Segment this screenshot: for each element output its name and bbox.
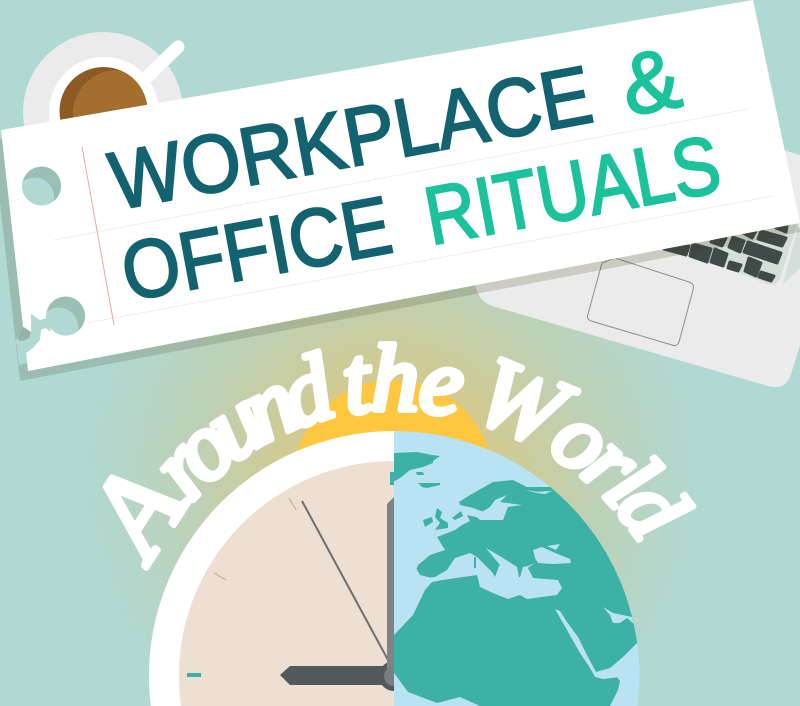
hour hand bbox=[280, 666, 390, 685]
title line: office: OFFICE bbox=[115, 180, 399, 319]
punch hole top bbox=[22, 166, 62, 206]
trackpad bbox=[587, 258, 694, 346]
continents bbox=[394, 480, 638, 706]
margin line bbox=[82, 147, 114, 325]
sun bbox=[293, 380, 493, 580]
clock face bbox=[179, 461, 394, 706]
minute hand bbox=[387, 497, 394, 676]
keyboard keys bbox=[664, 226, 787, 281]
hub bbox=[382, 662, 394, 691]
title line: workplace: WORKPLACE bbox=[103, 49, 599, 228]
panel: paper note bbox=[1, 0, 800, 371]
icon: coffee cup bbox=[23, 32, 184, 126]
islands bbox=[391, 452, 476, 568]
heading: around the world: Around the World bbox=[102, 341, 696, 571]
clock rim bbox=[149, 431, 394, 706]
paper shadow bbox=[0, 10, 800, 381]
title ampersand: & bbox=[614, 30, 688, 135]
laptop bbox=[462, 100, 800, 387]
tick marks bbox=[187, 498, 296, 677]
clock bbox=[149, 431, 394, 706]
hub cap bbox=[384, 669, 394, 686]
torn paper corner bbox=[16, 314, 51, 365]
seas bbox=[430, 490, 638, 679]
second hand bbox=[302, 501, 388, 660]
side strip bbox=[783, 227, 800, 284]
greenland overlap on clock bbox=[390, 472, 394, 485]
title bbox=[103, 30, 727, 319]
keyboard recess bbox=[655, 200, 797, 285]
globe bbox=[390, 431, 640, 706]
ruled lines bbox=[54, 109, 773, 323]
punch hole bottom bbox=[46, 296, 86, 336]
title line: rituals: RITUALS bbox=[418, 119, 727, 263]
sun glow bbox=[83, 170, 703, 706]
